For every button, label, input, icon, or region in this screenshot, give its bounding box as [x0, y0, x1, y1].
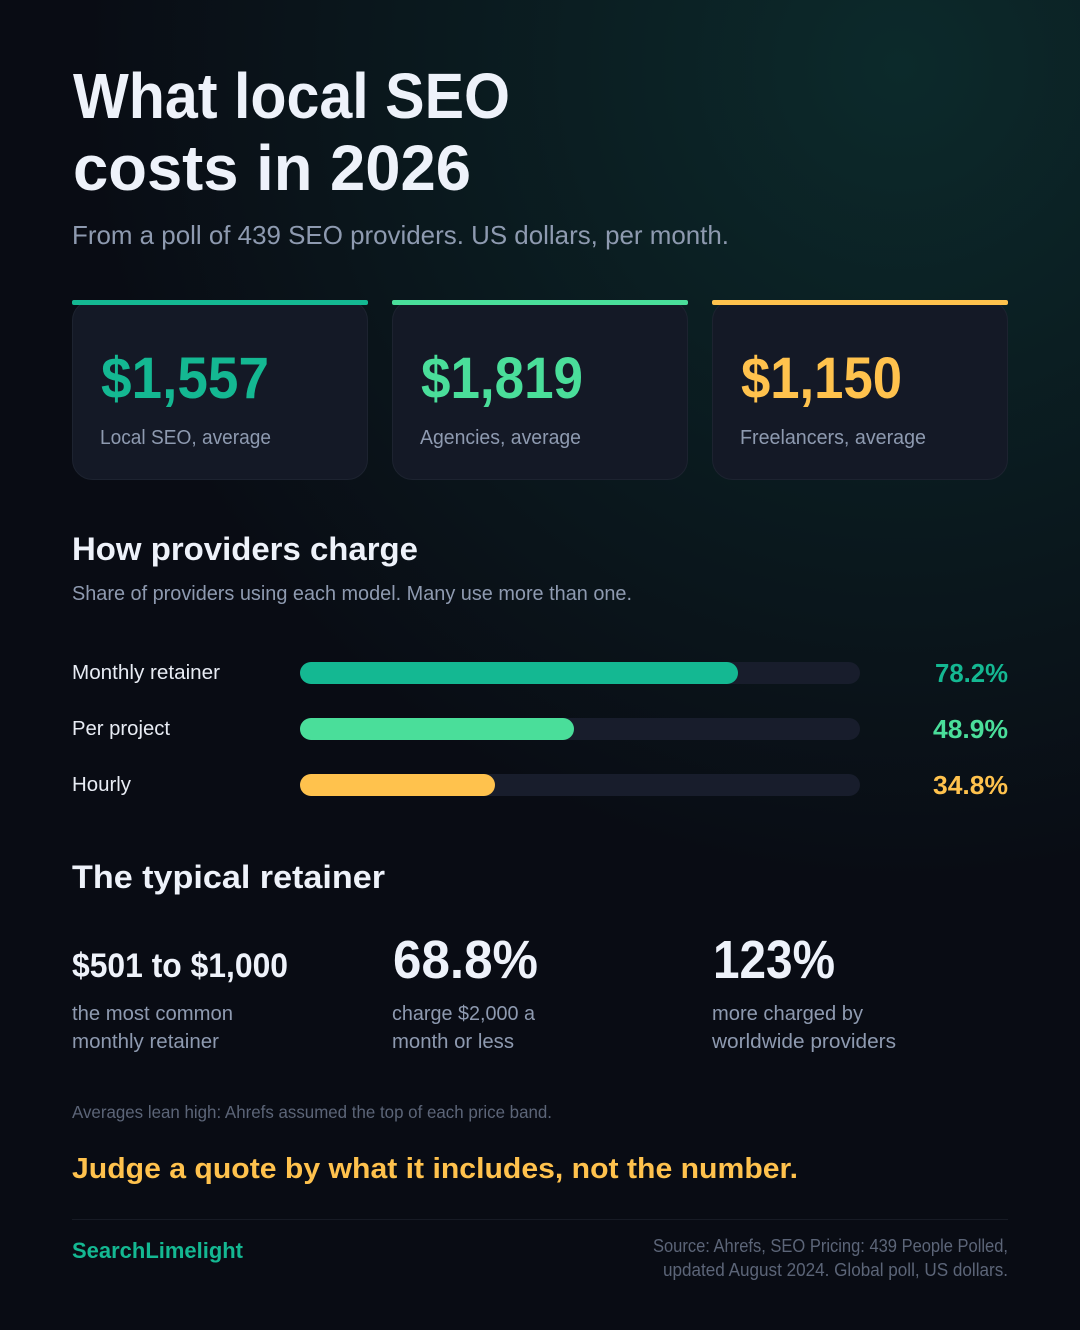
- section note: Share of providers using each model. Many use more than one.: [72, 583, 632, 605]
- panel: local SEO average: [72, 300, 368, 480]
- bar chart: [72, 658, 1008, 800]
- panel: local SEO average: $1,557: [101, 346, 269, 411]
- source: [653, 1236, 1008, 1280]
- panel: freelancers average: Freelancers, average: [740, 427, 926, 449]
- title: [73, 60, 510, 204]
- stat: most common retainer: $501 to $1,000: [72, 947, 288, 985]
- bar: per project: [72, 714, 1008, 744]
- title: What local SEO: [73, 60, 510, 132]
- footnote: Averages lean high: Ahrefs assumed the top of each price band.: [72, 1102, 552, 1122]
- stat: most common retainer: [72, 947, 288, 1053]
- bar: monthly retainer: [72, 658, 1008, 688]
- stat: worldwide providers: [711, 930, 896, 1053]
- stat: charge 2000 or less: charge $2,000 a: [392, 1003, 536, 1025]
- stat: worldwide providers: more charged by: [712, 1003, 863, 1025]
- source: Source: Ahrefs, SEO Pricing: 439 People Polled,: [653, 1236, 1008, 1256]
- title: costs in 2026: [73, 132, 471, 204]
- stat: charge 2000 or less: [392, 930, 538, 1053]
- bar: hourly: [72, 770, 1008, 800]
- heading: the typical retainer: The typical retainer: [72, 859, 385, 895]
- panel: agencies average: [392, 300, 688, 480]
- stat: charge 2000 or less: 68.8%: [393, 930, 538, 990]
- bar: hourly: 34.8%: [933, 770, 1008, 800]
- source: updated August 2024. Global poll, US dollars.: [663, 1260, 1008, 1280]
- subtitle: From a poll of 439 SEO providers. US dollars, per month.: [72, 220, 729, 250]
- bar: per project: Per project: [72, 718, 170, 740]
- panel: freelancers average: $1,150: [741, 346, 902, 411]
- stat: worldwide providers: worldwide providers: [711, 1031, 896, 1053]
- stat: most common retainer: the most common: [72, 1003, 233, 1025]
- bar: hourly: Hourly: [72, 774, 131, 796]
- callout: Judge a quote by what it includes, not the number.: [72, 1153, 798, 1185]
- stat: most common retainer: monthly retainer: [72, 1031, 219, 1053]
- bar: monthly retainer: 78.2%: [935, 658, 1008, 688]
- stat: charge 2000 or less: month or less: [392, 1031, 514, 1053]
- brand: SearchLimelight: [72, 1238, 244, 1263]
- heading: how providers charge: How providers charge: [72, 531, 418, 567]
- stat: worldwide providers: 123%: [713, 930, 835, 990]
- panel: agencies average: $1,819: [421, 346, 583, 411]
- panel: freelancers average: [712, 300, 1008, 480]
- panel: local SEO average: Local SEO, average: [100, 427, 271, 449]
- panel: agencies average: Agencies, average: [420, 427, 581, 449]
- bar: monthly retainer: Monthly retainer: [72, 662, 220, 684]
- bar: per project: 48.9%: [933, 714, 1008, 744]
